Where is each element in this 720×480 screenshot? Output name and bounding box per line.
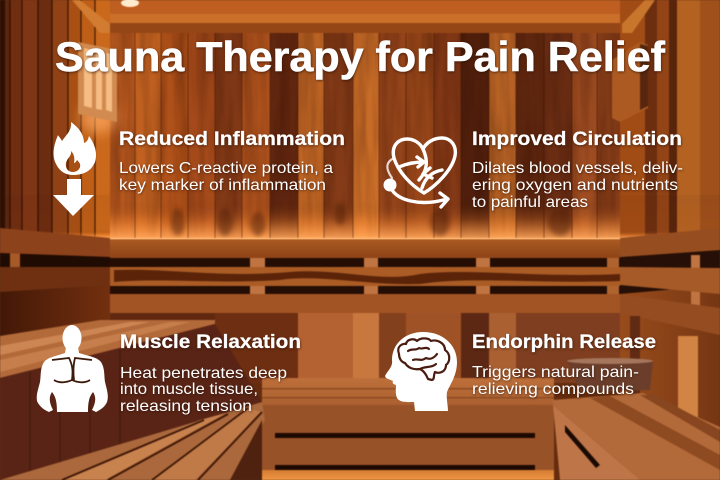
left rails and bench [0, 228, 262, 480]
bucket [567, 358, 653, 392]
left wall [0, 0, 110, 238]
text block [472, 160, 683, 211]
icon: heart with circulation arrows [384, 138, 455, 207]
text block: into muscle tissue, [120, 381, 258, 398]
right front bench [553, 393, 720, 480]
text block: relieving compounds [472, 381, 634, 398]
text block [119, 160, 333, 194]
wall lamps [78, 42, 648, 134]
ceiling [0, 0, 720, 33]
icon: muscular torso [37, 325, 108, 412]
right rails and bench [620, 228, 720, 480]
text block [120, 365, 287, 415]
panel: reduced inflammation [53, 122, 345, 216]
heading: Reduced Inflammation [119, 128, 345, 150]
back rest rails [110, 238, 620, 313]
text block: to painful areas [472, 194, 588, 211]
text block: ering oxygen and nutrients [472, 177, 678, 194]
centre bench [262, 378, 554, 480]
text block: key marker of inflammation [119, 177, 326, 194]
text block: Lowers C-reactive protein, a [119, 160, 333, 177]
icon: flame with down arrow [53, 122, 96, 216]
heading: Muscle Relaxation [120, 331, 301, 353]
icon: head with brain [385, 332, 457, 411]
back wall planks [109, 33, 624, 238]
panel: muscle relaxation [37, 325, 301, 415]
right wall [620, 0, 720, 238]
text block: Heat penetrates deep [120, 365, 287, 382]
text block: releasing tension [120, 398, 252, 415]
lower wall [109, 313, 624, 383]
text block: Triggers natural pain- [472, 364, 639, 381]
heading: Improved Circulation [472, 128, 682, 150]
heading: Endorphin Release [472, 331, 656, 353]
panel: endorphin release [385, 331, 656, 411]
left front bench [0, 402, 265, 480]
text block [472, 364, 639, 398]
title: Sauna Therapy for Pain Relief [55, 33, 666, 80]
text block: Dilates blood vessels, deliv- [472, 160, 683, 177]
panel: improved circulation [384, 128, 683, 211]
